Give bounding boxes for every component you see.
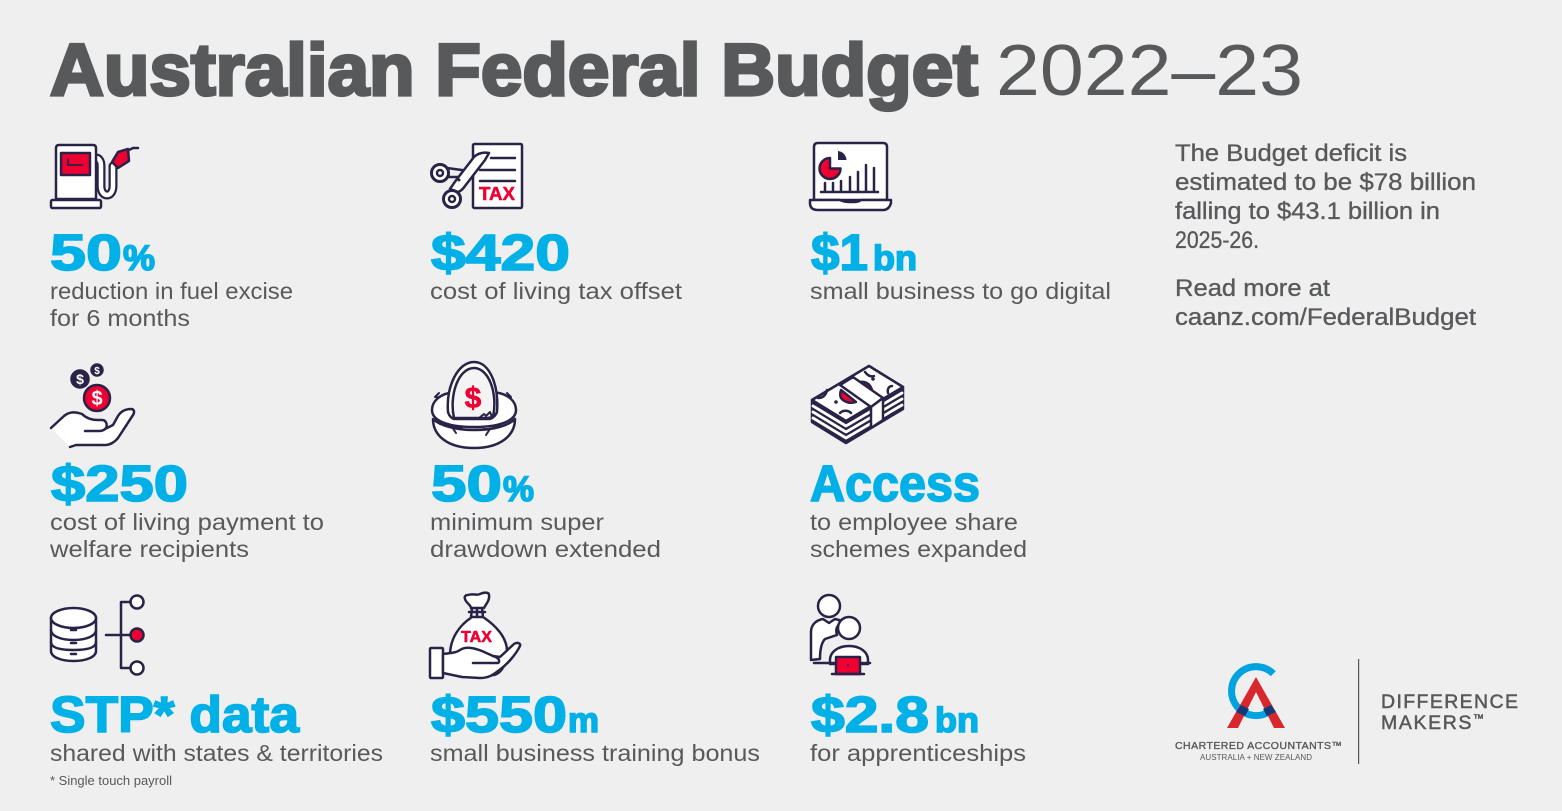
- logo: Chartered Accountants: [1175, 667, 1342, 762]
- tagline: Difference Makers: ™: [1473, 713, 1484, 725]
- description: welfare recipients: [49, 536, 249, 562]
- panel: apprenticeships: bn: [935, 701, 979, 740]
- icon: hand with coins: [51, 364, 134, 447]
- stat: 50: [50, 224, 122, 281]
- icon: laptop with charts: [810, 143, 891, 210]
- description: [50, 278, 293, 331]
- panel: apprenticeships: [810, 595, 1026, 766]
- stat: $2.8: [811, 686, 929, 743]
- text block: read more: caanz.com/FederalBudget: [1175, 304, 1476, 331]
- footnote: * Single touch payroll: [50, 774, 172, 788]
- text block: deficit: [1175, 140, 1476, 254]
- icon: scissors and tax form: TAX: [479, 184, 515, 204]
- description: for 6 months: [50, 305, 190, 331]
- description: [810, 509, 1027, 562]
- panel: training bonus: [430, 593, 760, 766]
- panel: employee share schemes: [810, 366, 1027, 562]
- description: [49, 509, 324, 562]
- title: 2022–23: [996, 31, 1303, 111]
- stat: $250: [51, 455, 188, 512]
- panel: super drawdown: [430, 362, 661, 562]
- logo: Chartered Accountants: CHARTERED ACCOUNTANTS™: [1175, 740, 1342, 752]
- text block: deficit: estimated to be $78 billion: [1175, 169, 1476, 196]
- panel: super drawdown: %: [503, 470, 534, 509]
- text block: deficit: falling to $43.1 billion in: [1175, 198, 1440, 225]
- description: small business training bonus: [430, 740, 760, 766]
- panel: STP data: [50, 596, 383, 788]
- stat: Access: [810, 455, 980, 512]
- panel: tax offset: [430, 144, 682, 304]
- icon: hand with coins: $: [94, 366, 100, 377]
- stat: STP* data: [50, 686, 300, 743]
- description: [430, 509, 661, 562]
- icon: tax bag in hand: [430, 593, 520, 678]
- description: to employee share: [810, 509, 1018, 535]
- text block: read more: [1175, 275, 1476, 331]
- logo: Chartered Accountants: AUSTRALIA + NEW ZEALAND: [1200, 753, 1312, 762]
- stat: $1: [811, 224, 868, 281]
- panel: welfare payment: [49, 364, 324, 562]
- title: Australian Federal Budget: [50, 30, 978, 111]
- icon: hand with coins: $: [76, 371, 84, 387]
- icon: hand with coins: $: [91, 388, 103, 410]
- stat: $550: [431, 686, 567, 743]
- stat: 50: [431, 455, 502, 512]
- description: reduction in fuel excise: [50, 278, 293, 304]
- description: cost of living tax offset: [430, 278, 682, 304]
- tagline: Difference Makers: [1381, 691, 1518, 734]
- stat: $420: [431, 224, 570, 281]
- description: shared with states & territories: [50, 740, 383, 766]
- text block: deficit: The Budget deficit is: [1175, 140, 1407, 167]
- description: cost of living payment to: [50, 509, 324, 535]
- panel: fuel excise: [50, 145, 293, 331]
- icon: CA mark: [1227, 667, 1285, 728]
- description: small business to go digital: [810, 278, 1111, 304]
- text block: deficit: 2025-26.: [1175, 227, 1259, 254]
- description: schemes expanded: [810, 536, 1027, 562]
- panel: training bonus: m: [568, 701, 599, 740]
- tagline: Difference Makers: DIFFERENCE: [1381, 691, 1518, 713]
- panel: fuel excise: %: [123, 239, 155, 278]
- icon: stack of money: [812, 366, 903, 443]
- icon: nest egg: $: [465, 382, 482, 415]
- text block: read more: Read more at: [1175, 275, 1330, 302]
- panel: digital: bn: [873, 239, 917, 278]
- description: drawdown extended: [430, 536, 661, 562]
- icon: fuel pump: [51, 145, 138, 208]
- icon: scissors and tax form: [432, 144, 522, 208]
- panel: digital: [810, 143, 1111, 304]
- icon: database with connections: [51, 596, 144, 674]
- icon: nest egg: [432, 362, 516, 448]
- icon: people with laptop: [811, 595, 870, 674]
- icon: tax bag in hand: TAX: [461, 629, 492, 646]
- description: for apprenticeships: [810, 740, 1026, 766]
- tagline: Difference Makers: MAKERS: [1381, 712, 1471, 734]
- description: minimum super: [430, 509, 604, 535]
